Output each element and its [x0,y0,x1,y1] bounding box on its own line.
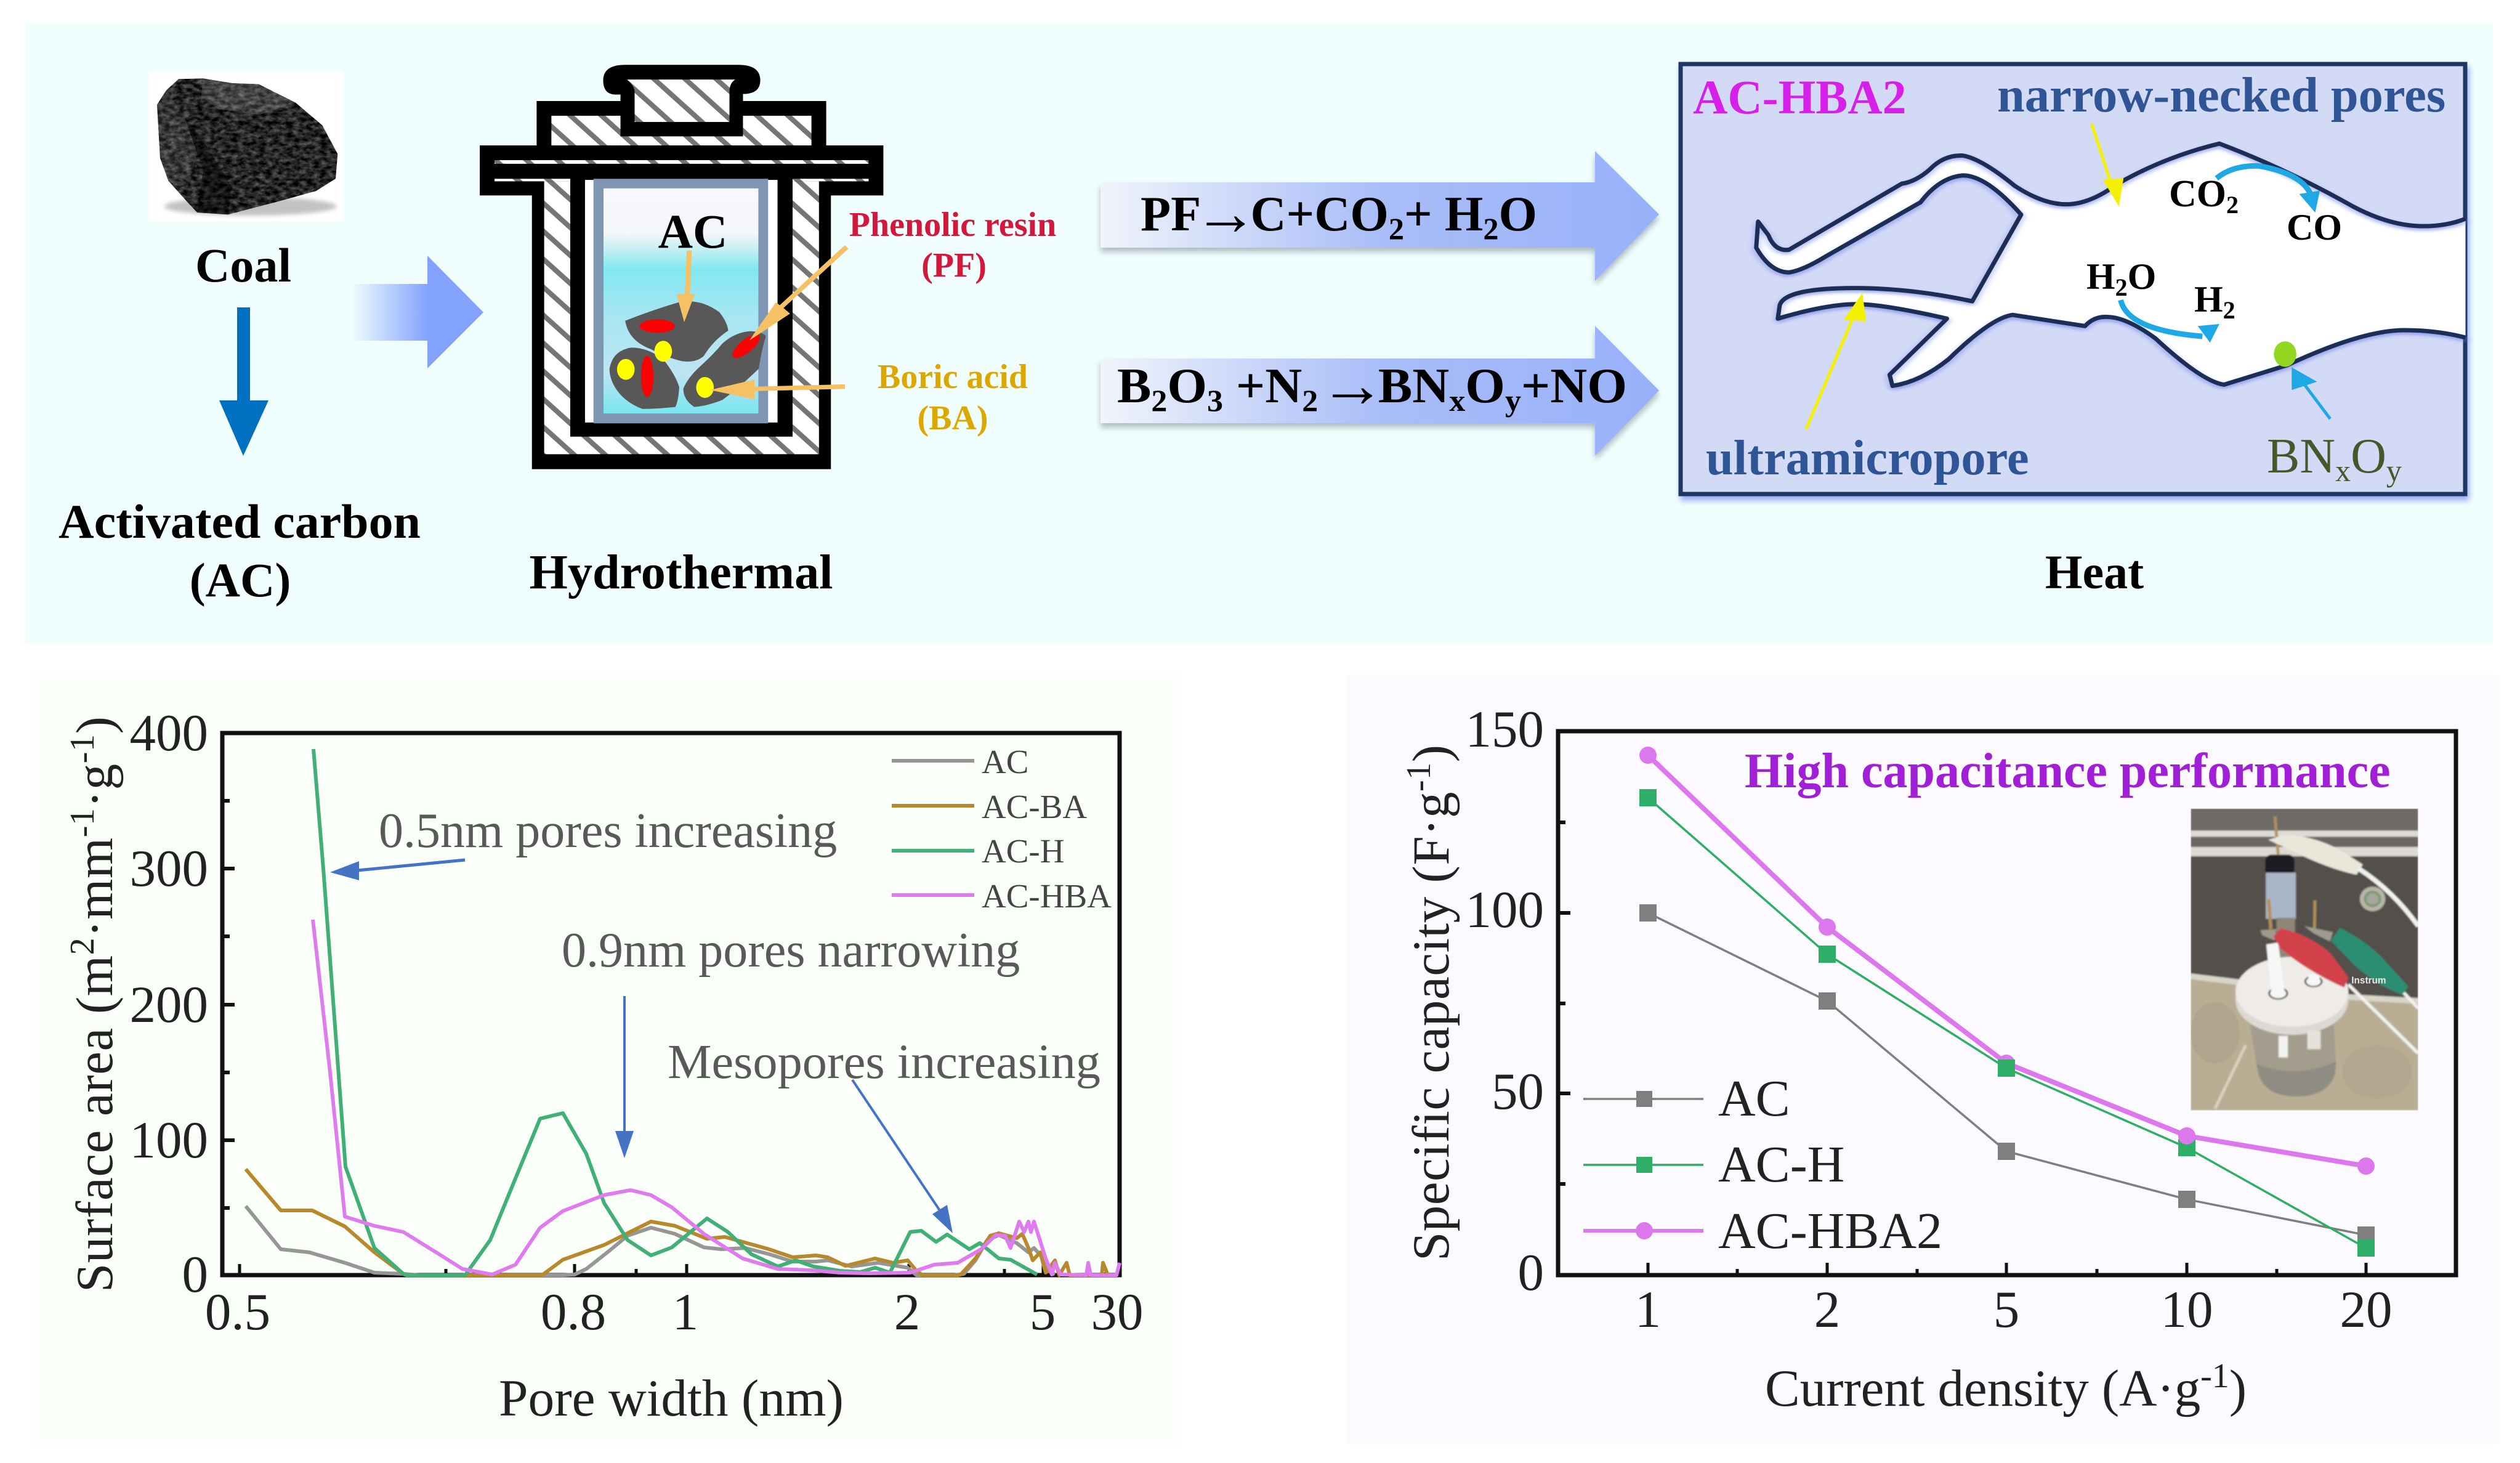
label: Activated carbon (AC) [59,495,421,607]
label: Hydrothermal: Hydrothermal [530,546,833,599]
label: Coal: Coal [195,238,291,292]
annotation: 0.5nm pores increasing [330,804,837,880]
x axis tick labels: 2 [894,1283,920,1341]
chart frame and ticks [1558,731,2456,1275]
y axis tick labels: 200 [129,976,208,1034]
annotation: 0.5nm pores increasing: 0.5nm pores increasing [379,804,837,858]
marker: AC-H at 5 A/g, drawn over the pink circle [1998,1060,2015,1077]
arrow: narrow-necked pore pointer [2091,124,2123,206]
label: ultramicropore: ultramicropore [1706,431,2029,485]
label: AC in reactor: AC [658,205,727,258]
label: BNxOy: x [2335,453,2351,488]
arrow: phenolic resin pointer [749,245,849,341]
label: Activated carbon (AC): (AC) [190,553,291,607]
label: Boric acid (BA): Boric acid [878,358,1028,396]
label: Boric acid (BA) [878,358,1028,437]
legend: AC-H [1718,1136,1844,1193]
text: PF reaction equation: + H [1404,187,1483,241]
y axis tick labels: 150 [1466,700,1544,758]
x axis tick labels: 20 [2340,1281,2392,1339]
x axis tick labels: 30 [1091,1283,1143,1341]
y axis title: ·g [66,764,124,808]
x axis title: -1 [2200,1357,2229,1395]
arrow: boric acid pointer [710,379,845,399]
text: B2O3 reaction equation: +N [1223,359,1302,413]
text: PF reaction equation: PF [1141,187,1201,241]
x axis tick labels: 5 [1993,1281,2019,1339]
y axis tick labels [1466,700,1544,1302]
icon: hydrothermal autoclave [480,65,883,469]
y axis title: ) [1402,745,1460,762]
text: B2O3 reaction equation: y [1505,383,1521,418]
legend [1583,1070,1942,1260]
text: PF reaction equation: → [1193,178,1258,249]
x axis title: ) [2229,1360,2247,1417]
y axis tick labels: 0 [1517,1244,1544,1302]
arrow: coal to activated carbon [219,307,269,456]
panel: pore size chart background [33,675,1178,1444]
text: PF reaction equation: 2 [1483,211,1498,246]
text: B2O3 reaction equation: O [1167,359,1207,413]
x axis tick labels: 2 [1814,1281,1840,1339]
annotation: Mesopores increasing [668,1035,1100,1233]
annotation: 0.9nm pores narrowing [562,923,1020,1158]
legend [892,743,1112,915]
legend: AC [982,743,1028,780]
x axis tick labels: 0.8 [541,1283,606,1341]
series: AC-BA [246,1169,1108,1275]
y axis title: -1 [63,808,102,837]
arrow: B2O3 reaction [1100,326,1659,456]
legend: AC-BA [982,788,1087,825]
label: CO: CO [2287,207,2342,248]
chart frame and ticks [222,733,1120,1275]
y axis title: Surface area (m [66,955,124,1292]
panel: synthesis scheme background [25,23,2493,644]
text: B2O3 reaction equation: → [1319,350,1386,421]
y axis tick labels: 0 [182,1246,208,1303]
label: H2: H [2194,279,2223,320]
label: AC-HBA2: AC-HBA2 [1693,70,1907,124]
label: Heat: Heat [2045,545,2144,599]
panel: AC-HBA2 pore structure [1681,64,2466,494]
chart: pore width distribution [63,704,1143,1427]
arrow: CO2 to CO [2216,166,2320,213]
diagram: pore channel [1756,124,2466,429]
label: Phenolic resin (PF) [849,206,1056,285]
text: PF reaction equation: O [1498,187,1537,241]
text: B2O3 reaction equation: 2 [1151,383,1167,418]
label: CO2: CO [2169,173,2226,215]
icon: activated carbon particles [610,301,766,409]
legend: AC [1718,1070,1790,1127]
x axis tick labels: 1 [672,1283,698,1341]
label: BNxOy: BN [2267,429,2335,484]
text: B2O3 reaction equation: x [1449,383,1465,418]
text: B2O3 reaction equation: B [1117,359,1150,413]
label: Phenolic resin (PF): Phenolic resin [849,206,1056,244]
legend: AC-HBA2 [1718,1202,1942,1260]
text: B2O3 reaction equation: O [1465,359,1505,413]
y axis tick labels: 300 [129,840,208,898]
label: Activated carbon (AC): Activated carbon [59,495,421,548]
label: Boric acid (BA): (BA) [917,399,988,437]
series: AC-H [313,749,1037,1275]
text: instrument brand in photo: Instrum [2351,976,2386,986]
text: PF reaction equation: C+CO [1251,187,1389,241]
x axis tick labels: 5 [1030,1283,1056,1341]
icon: BNxOy green dot [2274,341,2296,367]
x axis tick labels: 10 [2160,1281,2213,1339]
series: AC [246,1206,1055,1275]
y axis title: ) [66,716,124,734]
label: CO2: 2 [2226,191,2239,219]
y axis tick labels: 100 [1466,881,1544,939]
x axis tick labels [205,1283,1143,1341]
x axis tick labels: 1 [1635,1281,1661,1339]
y axis tick labels: 50 [1492,1063,1544,1121]
text: B2O3 reaction equation: +NO [1521,359,1627,413]
annotation: Mesopores increasing: Mesopores increasing [668,1035,1100,1089]
x axis tick labels [1635,1281,2392,1339]
panel: capacity chart background [1347,675,2500,1444]
x axis tick labels: 0.5 [205,1283,270,1341]
icon: coal lump photo [149,71,343,222]
icon: resin and boric acid spots [617,319,764,398]
arrow: PF reaction [1100,151,1659,281]
label: BNxOy: y [2386,453,2402,488]
legend: AC-H [982,832,1064,870]
y axis title: -1 [1400,763,1438,792]
text: B2O3 reaction equation: 2 [1302,383,1318,418]
y axis title: -1 [63,734,102,763]
chart: specific capacity vs current density [1400,700,2456,1417]
label: H2O: H [2086,256,2115,297]
y axis tick labels: 400 [129,704,208,762]
label: H2: 2 [2223,296,2235,324]
label: narrow-necked pores: narrow-necked pores [1997,68,2445,123]
y axis title: ·mm [66,838,124,938]
x axis title: Current density (A·g [1765,1360,2200,1417]
title: High capacitance performance: High capacitance performance [1745,744,2391,798]
y axis tick labels [129,704,208,1303]
series: AC-H [1639,789,2375,1257]
arrow: H2O to H2 [2121,300,2219,342]
label: Phenolic resin (PF): (PF) [921,246,987,285]
text: B2O3 reaction equation: 3 [1207,383,1223,418]
annotation: 0.9nm pores narrowing: 0.9nm pores narrowing [562,923,1020,978]
text: B2O3 reaction equation: BN [1378,359,1449,413]
arrow: ultramicropore pointer [1806,293,1866,429]
y axis tick labels: 100 [129,1111,208,1169]
legend: AC-HBA [982,877,1112,915]
series: AC-HBA2 [1639,747,2375,1175]
label: H2O: 2 [2115,274,2128,301]
arrow: AC pointer [676,251,695,322]
photo: three-electrode cell [2191,809,2418,1111]
label: H2O: O [2128,256,2156,297]
y axis title: Specific capacity (F·g [1402,792,1460,1261]
series: AC [1639,904,2375,1244]
arrow: gradient arrow to hydrothermal reactor [350,256,483,368]
arrow: BNxOy pointer [2292,367,2330,419]
label: BNxOy: O [2351,429,2386,484]
series: AC-HBA [313,920,1120,1275]
y axis title: 2 [63,938,102,955]
text: PF reaction equation: 2 [1389,211,1404,246]
x axis title: Pore width (nm) [499,1369,844,1427]
